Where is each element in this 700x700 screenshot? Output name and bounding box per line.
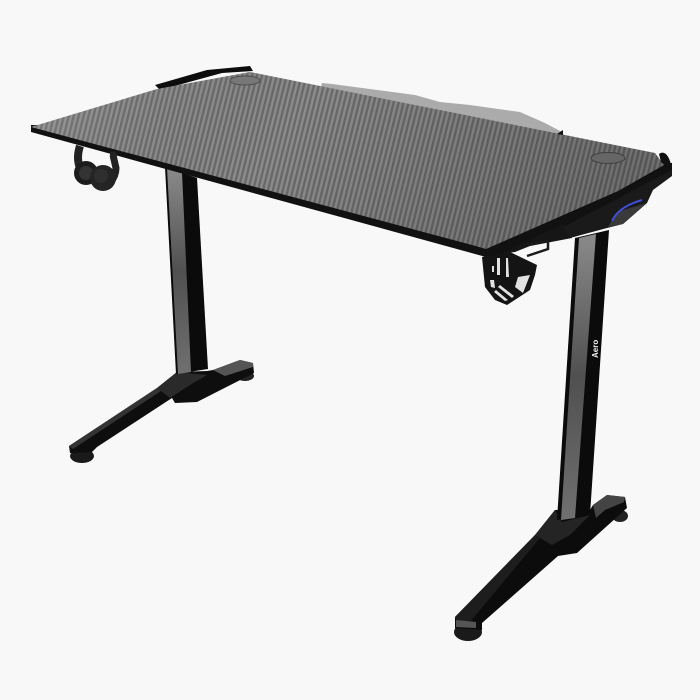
right corner guard	[659, 153, 671, 168]
right leg and foot	[454, 230, 628, 641]
desktop carbon fibre top	[31, 72, 664, 249]
right cable grommet	[591, 152, 625, 164]
right foot rear pad	[612, 510, 628, 522]
control box with blue LED	[563, 170, 672, 238]
headphones	[74, 161, 116, 191]
bag hook	[527, 241, 548, 256]
right foot base	[455, 495, 627, 630]
leg brand logo: Aero	[591, 340, 600, 358]
desktop edge thickness	[31, 125, 672, 257]
right upright column	[557, 230, 609, 520]
rear corner rim	[155, 66, 253, 90]
blue LED light	[612, 200, 642, 221]
right foot front pad	[454, 623, 482, 641]
cup holder	[482, 252, 537, 305]
left cable grommet	[230, 76, 260, 85]
cable tray at back of desk	[320, 83, 562, 140]
desktop shading	[31, 72, 664, 249]
left leg and foot	[69, 167, 254, 463]
left foot rear pad	[236, 371, 254, 381]
left upright column	[165, 167, 208, 374]
tray corner marker	[557, 130, 563, 135]
underside wedge	[500, 224, 572, 254]
left foot front pad	[70, 449, 94, 463]
headset hook	[74, 146, 116, 191]
left foot base	[69, 360, 254, 453]
